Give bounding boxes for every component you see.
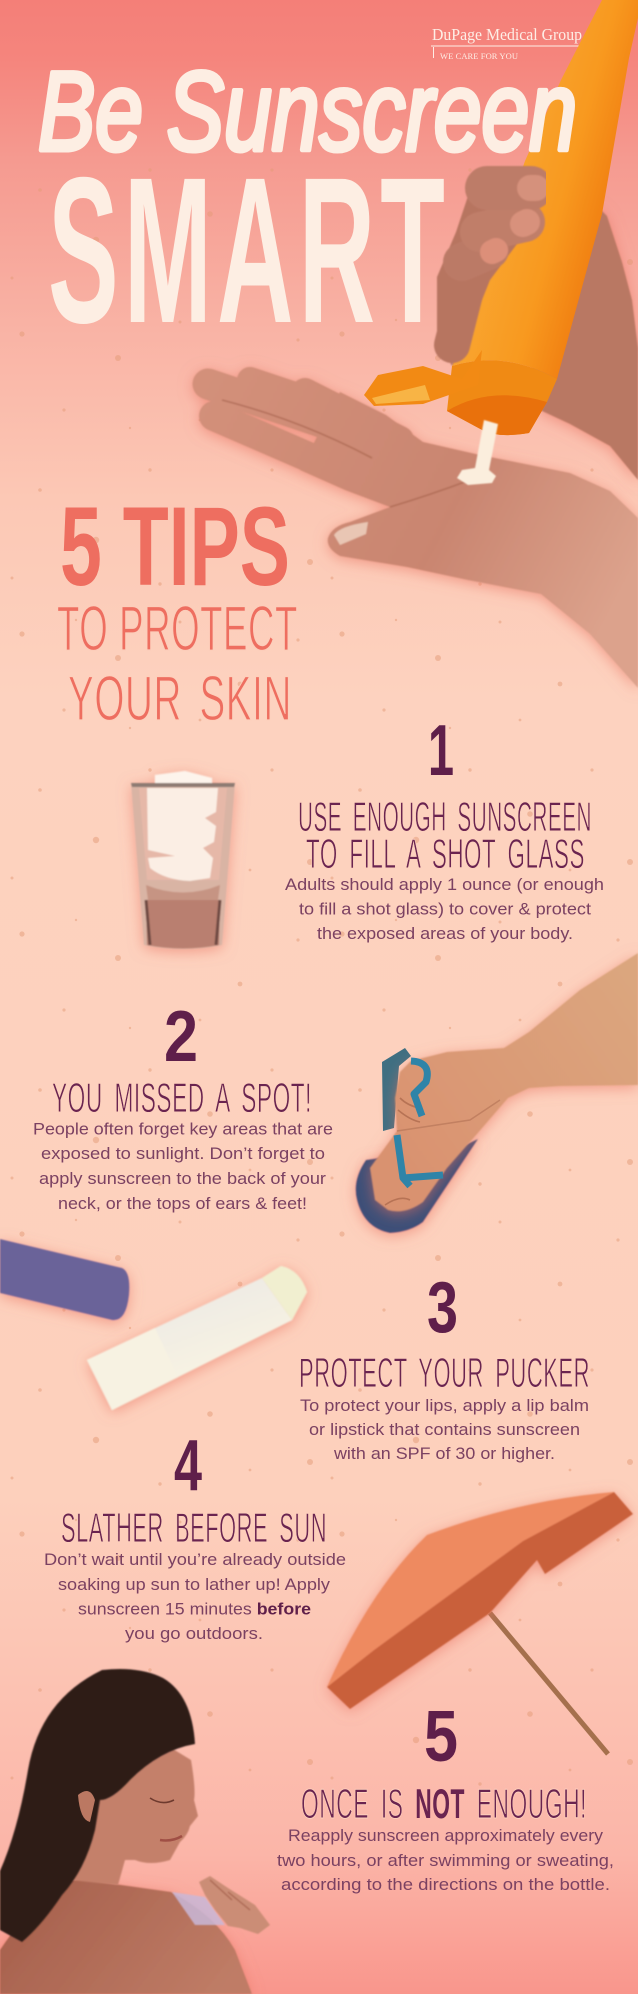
illustration: fingers gripping tube <box>437 166 536 366</box>
logo: DuPage Medical Group: DuPage Medical Group <box>432 25 582 44</box>
tip 2 body text: neck, or the tops of ears & feet! <box>58 1194 307 1213</box>
tip 2 body text: People often forget key areas that are <box>33 1120 333 1138</box>
tip 1 heading <box>298 793 592 877</box>
icon: flip-flop straps <box>397 1061 443 1186</box>
tip 1 body text: the exposed areas of your body. <box>317 924 573 943</box>
tip 1 body text <box>285 875 604 943</box>
umbrella canopy top <box>327 1492 614 1687</box>
tip 1 <box>285 711 604 943</box>
number 5: 5 <box>424 1697 458 1777</box>
tip 1 body text: Adults should apply 1 ounce (or enough <box>285 875 604 894</box>
woman's ear <box>78 1791 95 1822</box>
tip 2 body text: exposed to sunlight. Don’t forget to <box>41 1144 325 1163</box>
tip 2 heading: YOU MISSED A SPOT! <box>52 1074 312 1121</box>
tip 5 <box>277 1697 614 1894</box>
illustration: back of upper hand <box>520 205 638 480</box>
tip 4 body text: you go outdoors. <box>125 1624 263 1643</box>
number 1: 1 <box>428 711 454 791</box>
umbrella pole <box>490 1613 608 1754</box>
woman's facial features <box>150 1798 182 1840</box>
illustration: beach umbrella <box>327 1492 633 1754</box>
tip 5 body text: according to the directions on the bottle. <box>281 1875 610 1894</box>
tip 3 body text <box>300 1396 589 1463</box>
umbrella canopy side band <box>327 1492 633 1709</box>
tip 5 body text: two hours, or after swimming or sweating, <box>277 1851 614 1870</box>
tip 5 body text <box>277 1826 614 1894</box>
illustration: lip balm and lipstick <box>0 1239 307 1410</box>
illustration: sunscreen squeeze <box>457 420 498 485</box>
number 3: 3 <box>427 1268 458 1348</box>
number 4: 4 <box>174 1426 202 1506</box>
woman's hand <box>199 1876 270 1934</box>
tip 4 <box>44 1426 346 1643</box>
icon: lower flip-flop sole <box>356 1139 478 1233</box>
heading: your skin: YOUR SKIN <box>68 664 292 734</box>
illustration: woman applying sunscreen to shoulder <box>0 1669 270 1994</box>
tip 3 body text: or lipstick that contains sunscreen <box>309 1420 580 1439</box>
tip 3 body text: with an SPF of 30 or higher. <box>333 1444 555 1463</box>
illustration: lower open hand <box>208 380 638 688</box>
tip 4 body text: soaking up sun to lather up! Apply <box>58 1575 331 1594</box>
tip 4 body text: Don’t wait until you’re already outside <box>44 1550 346 1569</box>
tip 5 body text: Reapply sunscreen approximately every <box>288 1826 604 1845</box>
icon: shot glass filled with sunscreen <box>131 771 235 949</box>
tip 4 body text: sunscreen 15 minutes before <box>78 1600 311 1618</box>
tip 2 body text: apply sunscreen to the back of your <box>39 1169 326 1188</box>
illustration: legs <box>370 953 638 1211</box>
woman's hair <box>0 1669 195 1942</box>
tip 4 heading: SLATHER BEFORE SUN <box>61 1504 327 1551</box>
tip 3 <box>299 1268 590 1463</box>
tip 2 body text <box>33 1120 333 1213</box>
heading: 5 tips: 5 TIPS <box>60 484 290 609</box>
illustration: legs and feet in flip-flops <box>356 953 638 1233</box>
woman's back and shoulder <box>0 1878 252 1994</box>
logo: DuPage Medical Group: WE CARE FOR YOU <box>440 51 518 61</box>
sunscreen on shoulder <box>172 1892 225 1925</box>
illustration: open flip cap <box>364 350 482 406</box>
icon: upper flip-flop sole <box>382 1048 411 1131</box>
heading: to protect: TO PROTECT <box>57 594 298 664</box>
number 2: 2 <box>164 997 198 1077</box>
tip 4 body text <box>44 1550 346 1643</box>
icon: white lip balm <box>87 1266 307 1410</box>
logo: DuPage Medical Group <box>431 25 582 61</box>
woman's neck and face <box>70 1735 198 1885</box>
tip 1 body text: to fill a shot glass) to cover & protect <box>299 900 591 918</box>
illustration: orange sunscreen tube <box>452 0 638 379</box>
icon: purple lipstick tube <box>0 1239 129 1320</box>
tip 2 <box>33 997 333 1213</box>
tip 3 body text: To protect your lips, apply a lip balm <box>300 1396 589 1415</box>
illustration: hand squeezing sunscreen bottle <box>208 0 638 688</box>
